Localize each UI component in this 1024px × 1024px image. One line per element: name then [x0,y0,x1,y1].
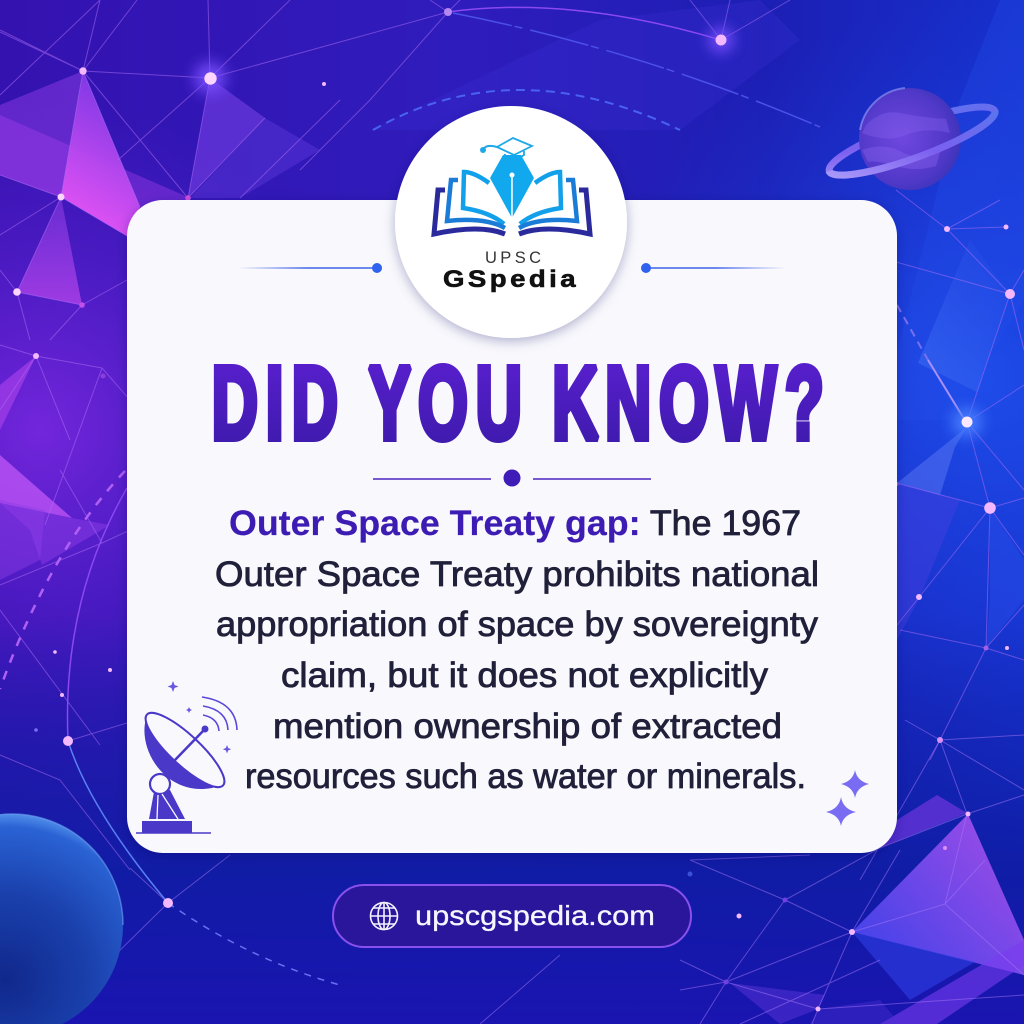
logo text: UPSC: UPSC [485,249,541,267]
website pill [333,885,691,947]
body text: claim, but it does not explicitly [281,656,769,695]
icon: graduation cap [480,138,532,159]
body text: Outer Space Treaty prohibits national [215,555,819,594]
body text: Outer Space Treaty gap: The 1967 [229,504,801,543]
main white card [127,200,897,853]
network: right polygons [897,240,1024,648]
icon: open book [434,172,590,234]
planet lower left [0,814,123,1024]
title: DID YOU KNOW? [212,346,824,461]
decorative line left of logo [238,263,382,273]
icon: satellite dish [136,681,237,833]
icon: sparkles [826,770,869,826]
body text [215,504,819,796]
logo text: GSpedia: GSpedia [443,267,579,293]
body text: mention ownership of extracted [273,707,782,746]
logo badge [395,106,627,338]
network: upper left polygons [0,71,320,305]
network: left middle polygons [0,356,110,580]
body text: appropriation of space by sovereignty [216,605,819,644]
icon: globe [370,902,398,930]
network: lower right polygons [730,795,1024,1024]
title divider [373,470,651,486]
body text: resources such as water or minerals. [245,757,806,796]
website address: upscgspedia.com [415,900,655,931]
planet with ring [823,88,1001,190]
icon: pen nib [490,155,534,218]
decorative line right of logo [641,263,786,273]
